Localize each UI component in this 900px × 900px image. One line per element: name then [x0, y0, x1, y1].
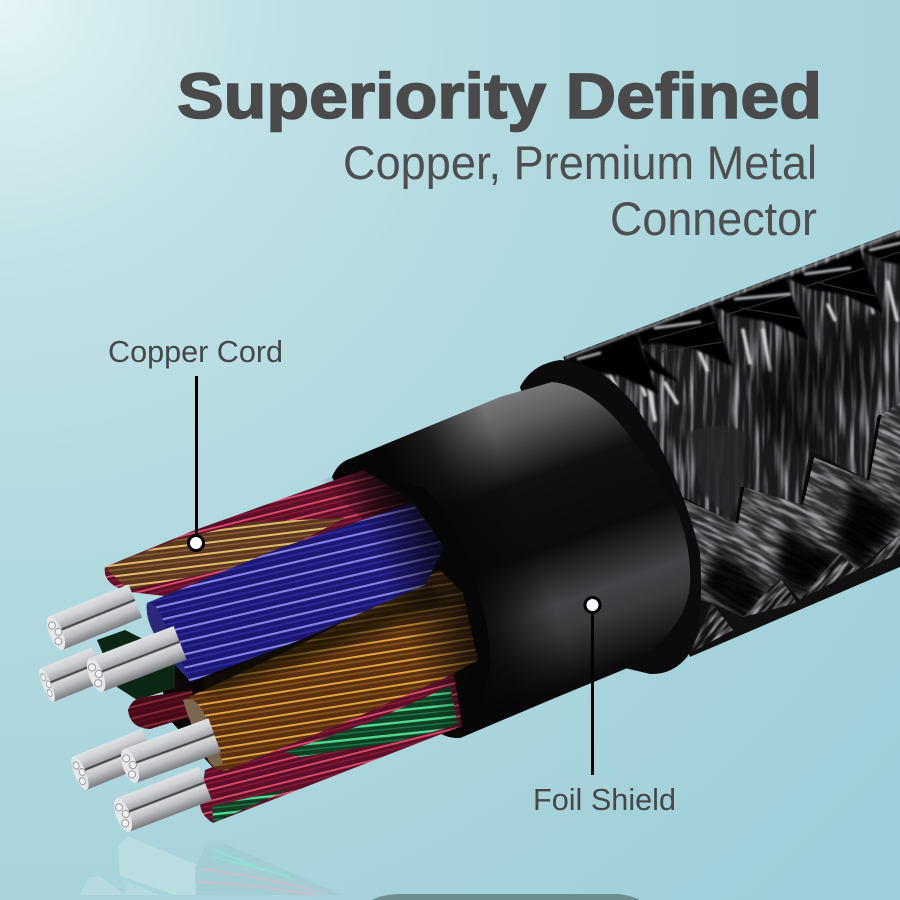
leader line	[591, 613, 594, 775]
callout label: Foil Shield	[533, 782, 676, 817]
dark shade bands	[755, 340, 830, 450]
tip of blue bundle	[147, 603, 190, 680]
light strands, bottom strip	[690, 533, 900, 652]
shade over dark red bundle	[128, 690, 195, 729]
shadow under blue bundle	[190, 578, 448, 692]
leader line	[195, 376, 198, 538]
callout: copper cord	[108, 334, 283, 550]
bundle: dark green rear	[97, 630, 175, 700]
shield darkening toward cable mouth	[332, 382, 690, 738]
callout label: Copper Cord	[108, 334, 283, 369]
bright glints below weave	[590, 280, 897, 420]
green strands upper	[285, 686, 458, 757]
conductor 1	[43, 584, 142, 652]
tip of orange bundle	[183, 699, 223, 766]
bundle: orange copper	[183, 570, 478, 770]
black weave cells along top	[562, 223, 900, 394]
bundle: red and gold top	[105, 470, 420, 600]
vertical fibres, middle band	[560, 225, 900, 545]
diagonal fibre cells, lower band	[684, 403, 900, 617]
subtitle line 1: Copper, Premium Metal	[343, 136, 817, 189]
conductor 2	[36, 647, 105, 703]
dark seams between weave cells	[737, 415, 880, 523]
sleeve base	[563, 230, 900, 657]
thin sheen lines inside top weave cells	[650, 252, 900, 352]
title: Superiority Defined	[177, 60, 822, 132]
bundle: red and green bottom	[200, 668, 462, 823]
silver conductor group	[36, 584, 221, 834]
shadow where bundles enter the shield	[350, 465, 490, 733]
foil shield cylinder	[332, 382, 690, 738]
dull patch	[690, 426, 746, 520]
gold strands	[105, 518, 345, 590]
conductor 4	[68, 729, 155, 792]
dark core filling gaps between bundles	[150, 560, 470, 770]
collar behind the foil shield	[520, 360, 701, 674]
conductor 5	[117, 718, 221, 785]
top edge glints	[566, 232, 900, 359]
callout: foil shield	[533, 598, 676, 817]
reflection of cable at bottom edge	[372, 894, 640, 900]
black cell ends	[700, 545, 770, 625]
marker dot	[585, 598, 600, 612]
conductor 6	[110, 767, 212, 834]
inner cable mouth	[332, 474, 490, 735]
subtitle line 2: Connector	[610, 192, 817, 245]
bundle: dark red rear	[128, 690, 195, 729]
bundle: blue	[147, 503, 444, 682]
conductor 3	[83, 626, 186, 694]
green strands lower	[212, 788, 292, 823]
marker dot	[188, 536, 204, 550]
reflection of wires on the surface	[80, 836, 342, 895]
shadow over top bundle end	[320, 468, 445, 535]
braided nylon sleeve	[563, 230, 900, 657]
